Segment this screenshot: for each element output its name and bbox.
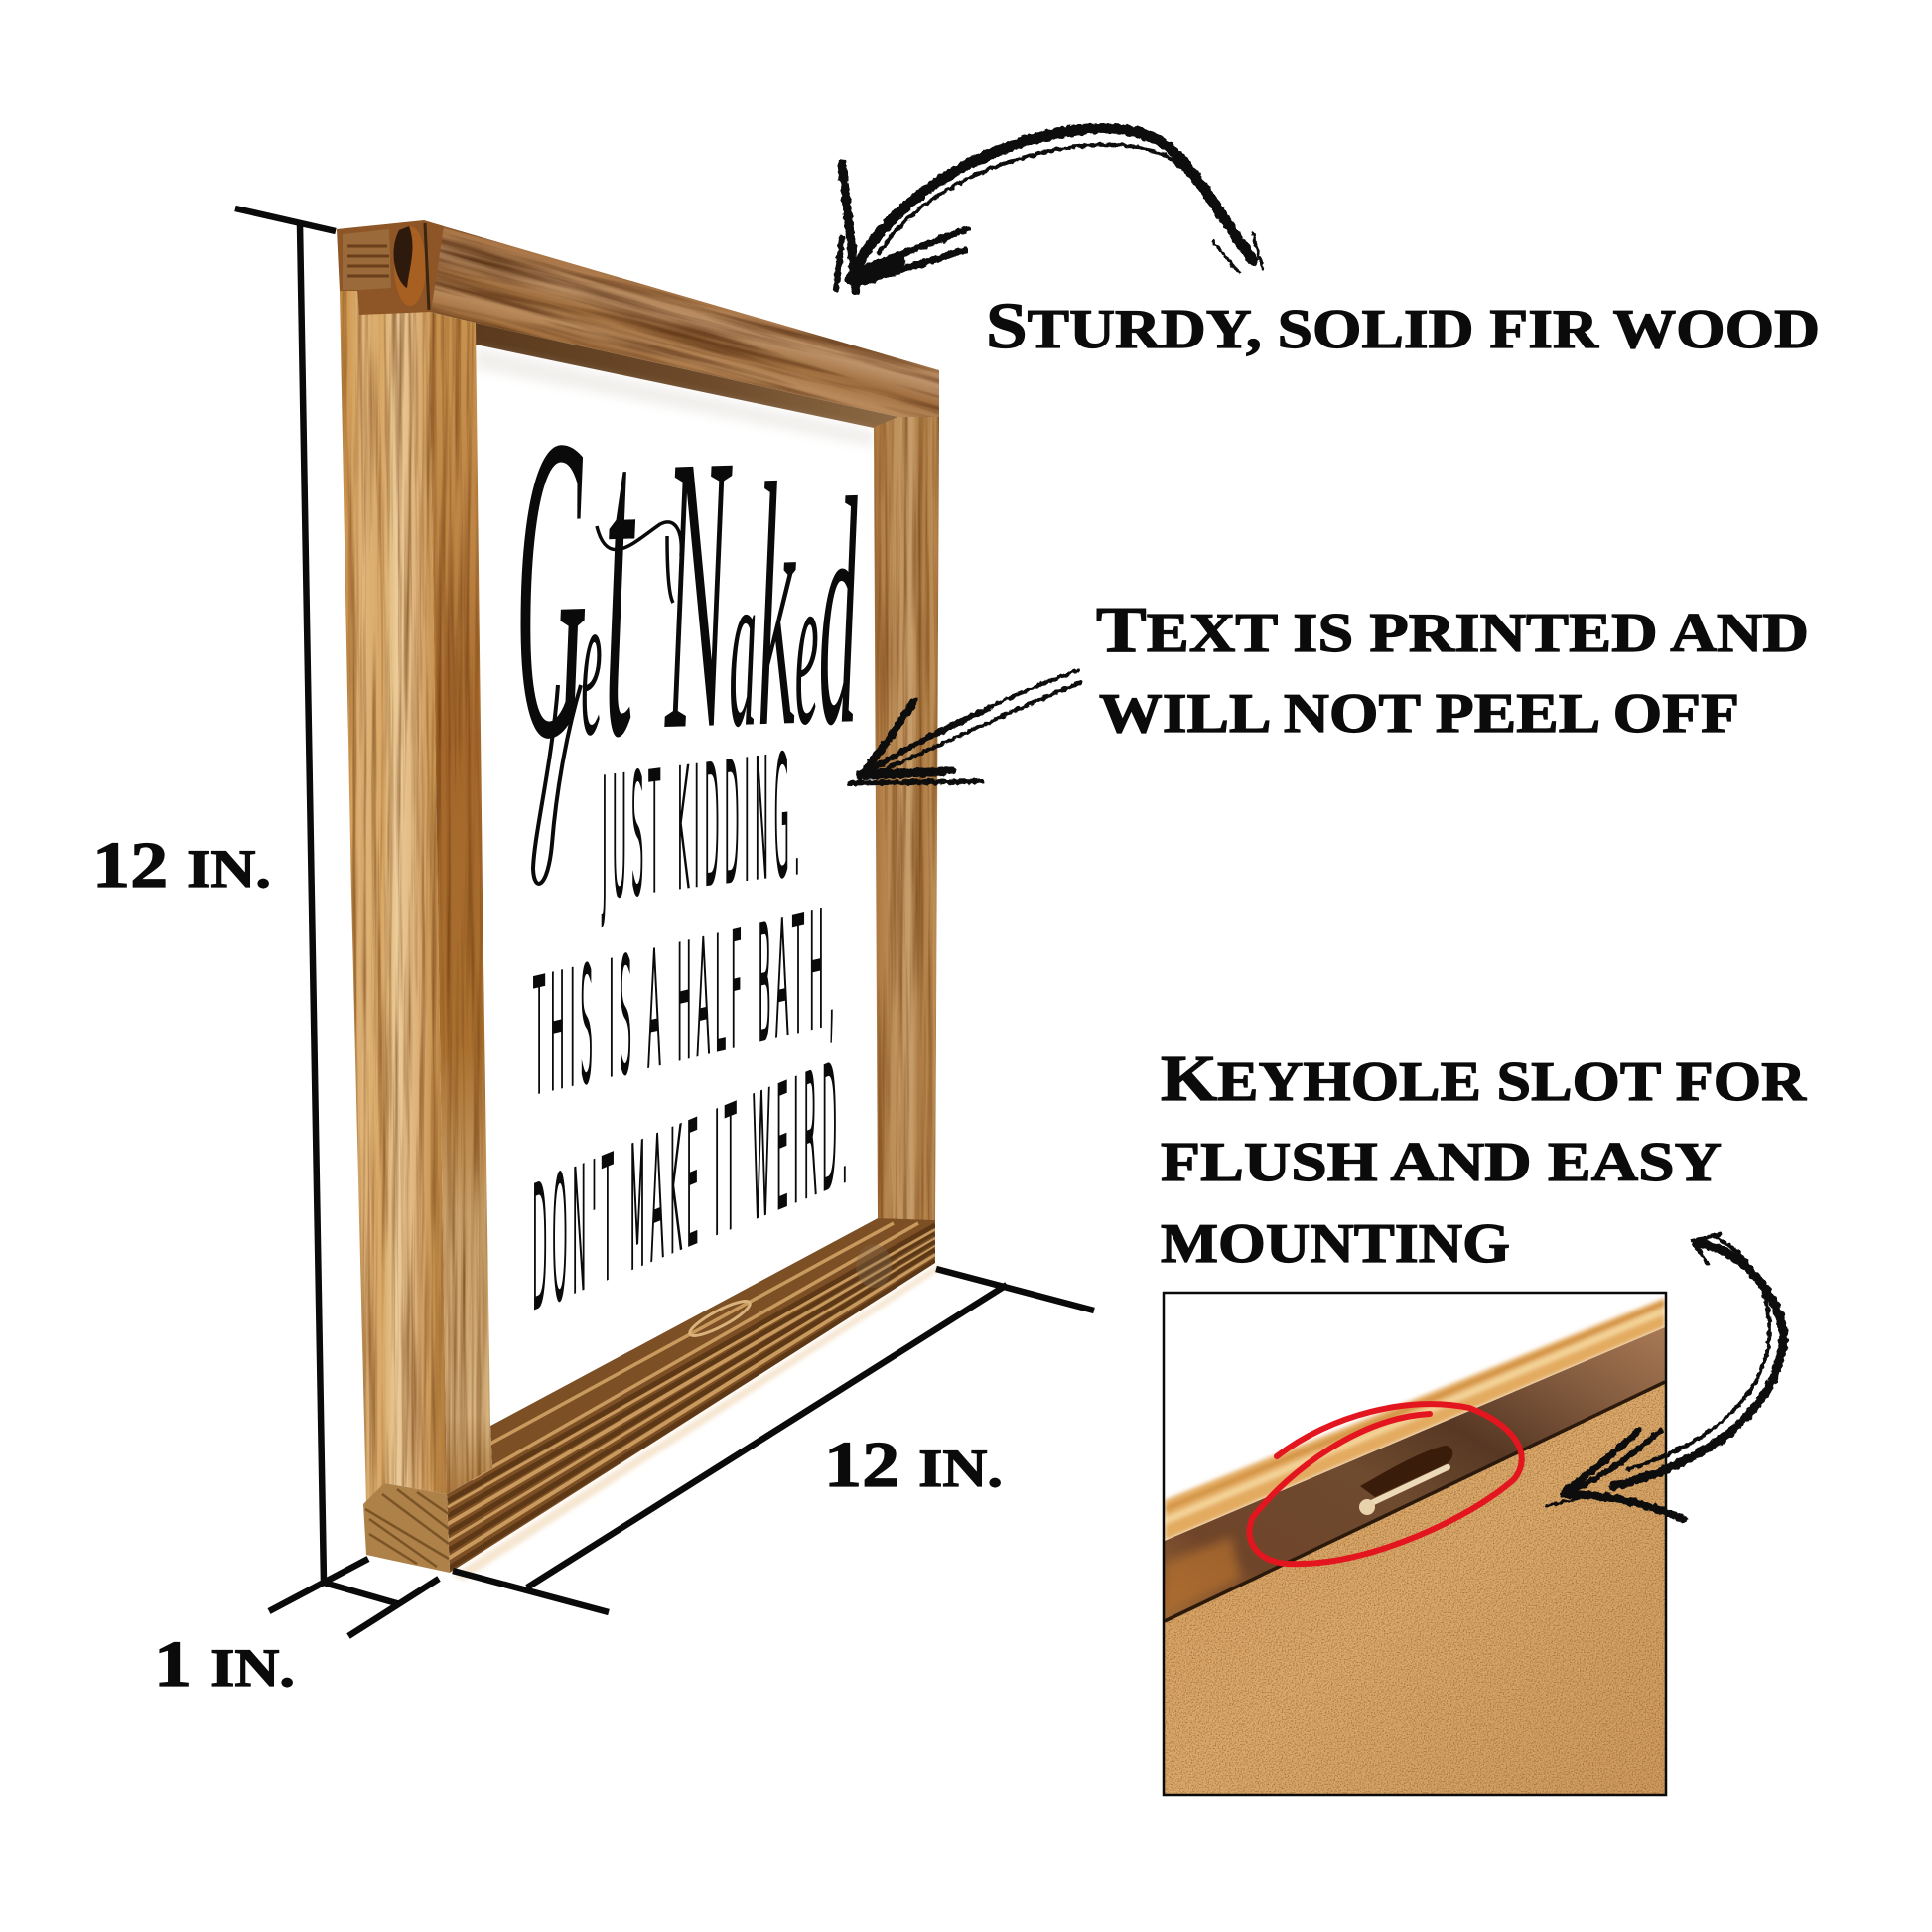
caption: keyhole slot: FLUSH AND EASY [1161,1132,1722,1193]
printed script: Get Naked: Naked [664,368,858,813]
dimension label: width: 12 IN. [824,1429,1003,1501]
keyhole detail photo panel [1164,1293,1666,1795]
caption: printed text: WILL NOT PEEL OFF [1099,683,1739,745]
bottom rail [447,1218,935,1573]
printed line: DON'T MAKE IT WEIRD.: DON'T MAKE IT WEIRD. [532,1025,848,1346]
arrow: to the wood frame [836,128,1263,290]
bottom-left corner block [363,1483,450,1573]
panel border [1164,1293,1666,1795]
wooden frame [336,204,996,1581]
dimension label: depth: 1 IN. [154,1628,295,1701]
caption: keyhole slot: MOUNTING [1161,1213,1510,1275]
arrow: to the keyhole slot [1547,1234,1783,1519]
infographic canvas [97,123,1818,1797]
arrow: to the printed text [850,670,1080,783]
top-left end grain [337,220,444,315]
frame top face [1165,1298,1665,1541]
dimension lines: width and depth [269,1269,1094,1636]
printed line: THIS IS A HALF BATH,: THIS IS A HALF BATH, [533,880,835,1130]
red circle around keyhole [1250,1404,1522,1564]
caption: keyhole slot [1161,1042,1807,1275]
right stile [874,417,939,1220]
caption: printed text [1096,594,1809,745]
printed line: JUST KIDDING.: JUST KIDDING. [602,723,800,934]
caption: printed text: TEXT IS PRINTED AND [1096,594,1809,666]
top rail [429,224,939,417]
dimension label: height: 12 IN. [92,829,271,901]
caption: fir wood: STURDY, SOLID FIR WOOD [986,290,1820,362]
left stile, outer face [336,283,447,1514]
sign panel with printed text [476,322,898,1426]
left stile, inner face [427,308,496,1499]
caption: keyhole slot: KEYHOLE SLOT FOR [1161,1042,1807,1115]
dimension lines: height [235,208,336,1583]
hardboard back [1165,1382,1665,1795]
printed script: Get Naked [515,322,858,884]
keyhole slot [1359,1446,1452,1515]
frame side edge [1165,1327,1665,1621]
printed script: Get Naked: Get [515,322,637,837]
shadow under bottom rail [453,1265,943,1581]
